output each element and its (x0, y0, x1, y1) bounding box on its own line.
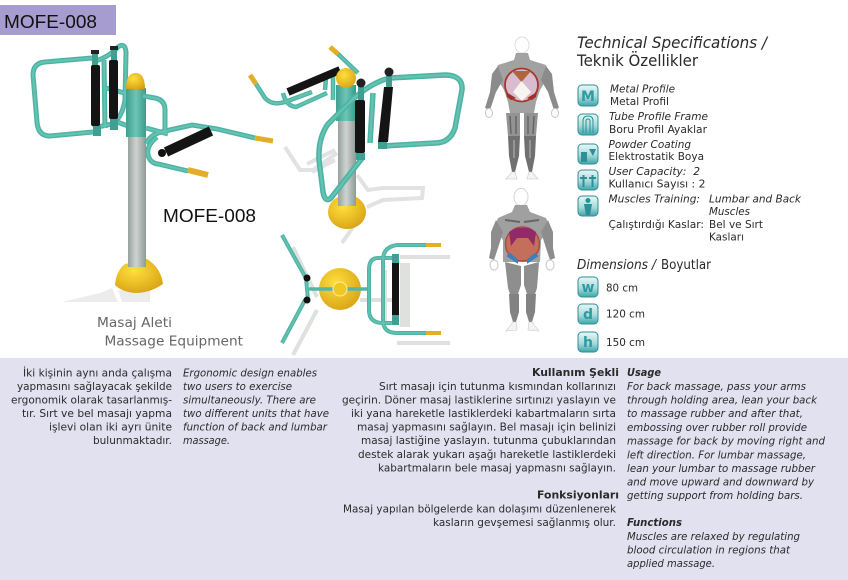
description: english intro: massage. (183, 434, 230, 447)
dimension: height (578, 332, 645, 352)
rollers (92, 52, 98, 66)
description: english usage: embossing over rubber roll provide (627, 421, 807, 434)
right arm (143, 96, 255, 171)
muscle chart: front view (489, 188, 555, 331)
feet (506, 322, 539, 331)
description: turkish functions: kasların gevşemesi sağlanmış olur. (433, 516, 616, 529)
spec: powder coating (608, 138, 704, 163)
description panel (0, 358, 848, 580)
description: turkish usage: destek alarak yukarı aşağı hareketle lastiklerdeki (358, 448, 616, 461)
description: turkish usage: masaj yapmasını sağlayın. Bel masajı için belinizi (357, 420, 616, 434)
dimension: depth (578, 304, 645, 324)
spec: metal profile: Metal Profil (610, 95, 669, 108)
muscle chart: back view (485, 37, 559, 179)
icon: users (578, 170, 598, 190)
model code badge: MOFE-008 (4, 11, 97, 32)
dimension: height: h (583, 335, 593, 351)
description: english functions (627, 516, 800, 570)
spec: tube profile (609, 110, 708, 136)
spec: powder coating: Powder Coating (608, 138, 691, 151)
thighs (505, 262, 539, 294)
spec: muscles training: Muscles (709, 205, 750, 218)
equipment view: front three-quarter (33, 45, 273, 302)
description: english functions: Functions (627, 516, 683, 529)
product code label: MOFE-008 (163, 205, 256, 226)
description: turkish usage: geçirin. Döner masaj lastiklerine sırtınızı yaslayın ve (342, 394, 616, 406)
thighs (506, 113, 538, 140)
equipment name: Massage Equipment (104, 334, 243, 350)
rollers (355, 100, 365, 153)
heading: dimensions: Dimensions / (577, 258, 658, 273)
shadow (285, 147, 423, 243)
description: english functions: blood circulation in regions that (627, 544, 791, 556)
spec: metal profile: Metal Profile (610, 83, 675, 96)
description: turkish usage: masaj lastiğine yaslayın. tutunma çubuklarından (361, 434, 616, 447)
description: turkish functions (343, 488, 619, 529)
description: turkish usage: Kullanım Şekli (532, 366, 619, 379)
left arms (282, 235, 308, 343)
spec: user capacity: Kullanıcı Sayısı : 2 (608, 178, 706, 191)
shoulders and chest (494, 205, 550, 262)
equipment name (97, 316, 243, 350)
spec: muscles training (608, 193, 802, 244)
description: english intro: function of back and lumbar (183, 420, 328, 434)
description: turkish intro: bulunmaktadır. (93, 434, 172, 447)
description: english usage: getting support from holding bars. (627, 489, 803, 502)
description: english intro (183, 366, 329, 447)
pole (128, 137, 146, 267)
icon: powder coating (578, 144, 598, 164)
equipment view: rear three-quarter (250, 47, 462, 243)
spec: metal profile (610, 83, 675, 108)
description: english intro: two users to exercise (183, 380, 292, 393)
dimension: width: w (582, 280, 595, 296)
base (328, 195, 366, 229)
description: english usage (627, 366, 825, 502)
arms (489, 220, 555, 260)
description: english intro: Ergonomic design enables (183, 366, 317, 380)
description: english usage: Usage (627, 366, 661, 379)
description: turkish usage: kabartmaların bele masaj yapmasnı sağlayın. (378, 462, 616, 474)
description: english functions: applied massage. (627, 557, 715, 570)
description: english usage: to massage rubber and after that, (627, 407, 803, 420)
description: turkish intro: yapmasını sağlayacak şekilde (17, 380, 172, 393)
heading: dimensions: Boyutlar (661, 258, 712, 273)
description: turkish functions: Fonksiyonları (537, 488, 619, 502)
shadow (293, 247, 450, 355)
dimension: depth: d (583, 307, 593, 323)
dimension: width (578, 277, 638, 297)
highlighted core muscles (506, 227, 540, 261)
spec: muscles training: Muscles Training: (608, 193, 700, 206)
dimension: depth: 120 cm (606, 308, 645, 321)
description: english intro: two different units that have (183, 407, 329, 420)
description: turkish intro: İki kişinin aynı anda çalışma (23, 366, 172, 380)
spec: user capacity (608, 165, 706, 191)
model code badge (0, 5, 116, 35)
pole (338, 120, 356, 206)
description: turkish intro: tır. Sırt ve bel masajı yapma (22, 407, 172, 420)
sleeve and cap (126, 88, 146, 137)
description: english usage: lean your lumbar to massage rubber (627, 462, 816, 475)
description: turkish usage: Sırt masajı için tutunma kısmından kollarınızı (379, 380, 616, 393)
description: english usage: massage for back by moving right and (627, 434, 825, 448)
spec: tube profile: Tube Profile Frame (609, 110, 708, 123)
description: english intro: simultaneously. There are (183, 394, 316, 406)
description: turkish intro: işlevi olan iki ayrı ünite (49, 420, 172, 434)
rear arms (256, 53, 358, 107)
calves (508, 136, 536, 172)
equipment view: top (282, 235, 450, 355)
base (319, 268, 361, 310)
spec: powder coating: Elektrostatik Boya (608, 150, 704, 163)
description: turkish intro (11, 366, 172, 447)
icon: tube frame (578, 114, 598, 135)
spec: muscles training: Lumbar and Back (709, 193, 802, 206)
handles (369, 245, 426, 333)
description: turkish functions: Masaj yapılan bölgelerde kan dolaşımı düzenlenerek (343, 502, 617, 516)
heading: dimensions (577, 258, 712, 273)
dimension: width: 80 cm (606, 282, 638, 295)
highlighted back muscles (505, 68, 538, 102)
base (115, 259, 163, 293)
spec: tube profile: Boru Profil Ayaklar (609, 123, 707, 136)
icon: metal profile (578, 85, 598, 106)
spec: muscles training: Bel ve Sırt (709, 218, 764, 231)
main frame (319, 75, 462, 200)
description: turkish usage: iki yana hareketle lastiklerdeki kabartmaların sırta (351, 407, 616, 420)
calves (509, 294, 536, 322)
spec: user capacity: User Capacity: 2 (608, 165, 700, 178)
dimension: height: 150 cm (606, 336, 645, 349)
shoulders and torso (495, 53, 549, 113)
spec: muscles training: Kasları (709, 231, 744, 244)
left frame (33, 45, 128, 136)
spec: muscles training: Çalıştırdığı Kaslar: (608, 218, 704, 231)
description: english usage: and move upward and downward by (627, 476, 815, 488)
feet (506, 172, 538, 179)
description: english functions: Muscles are relaxed by regulating (627, 530, 800, 543)
equipment name: Masaj Aleti (97, 316, 172, 331)
heading: technical specifications: Technical Specifications / (577, 33, 769, 52)
description: english usage: For back massage, pass your arms (627, 380, 806, 393)
heading: technical specifications (576, 33, 769, 70)
description: turkish usage (342, 366, 619, 474)
arms (485, 66, 559, 110)
description: english usage: through holding area, lean your back (627, 394, 818, 406)
icon: muscles (578, 196, 598, 216)
description: english usage: left direction. For lumbar massage, (627, 448, 806, 462)
heading: technical specifications: Teknik Özellikler (576, 51, 698, 70)
icon: metal profile: M (581, 89, 595, 105)
shadow (62, 288, 150, 302)
description: turkish intro: ergonomik olarak tasarlanmış- (11, 394, 172, 406)
